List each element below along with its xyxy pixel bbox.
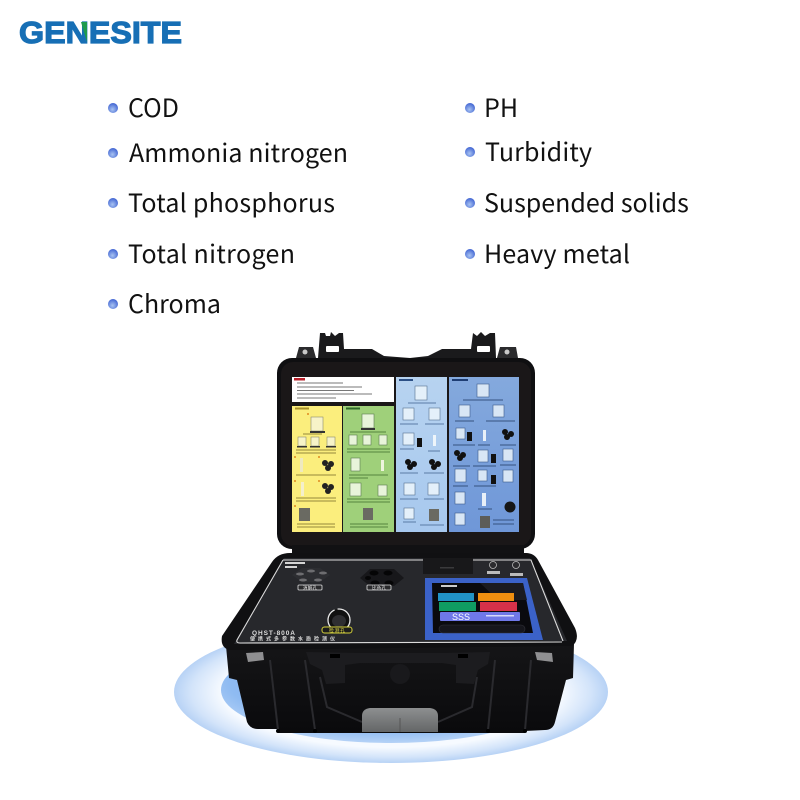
parameter list: left column: [108, 89, 348, 321]
handle: [362, 708, 438, 732]
bullet item: Ammonia nitrogen: Ammonia nitrogen: [129, 134, 348, 170]
bullet item: PH: PH: [484, 89, 518, 125]
instruction panel: light blue: [396, 377, 447, 532]
base rim: [222, 553, 577, 650]
case base: [222, 545, 577, 733]
model label: QHST-800A: [252, 630, 295, 637]
bullet item: Total phosphorus: Total phosphorus: [128, 184, 335, 220]
port cluster right: [360, 569, 404, 591]
bullet item: Turbidity: Turbidity: [485, 133, 592, 169]
model label: [250, 630, 335, 642]
printer slot: [423, 558, 473, 574]
instruction panel: blue: [449, 377, 519, 532]
label: colorimetric hole: 比色孔: [372, 584, 386, 591]
bullet item: Total nitrogen: Total nitrogen: [128, 235, 295, 271]
bullet item: Heavy metal: Heavy metal: [484, 235, 630, 271]
front clasps: [270, 660, 531, 730]
logo: GENESITE: GENESITE: [19, 16, 182, 50]
bullet item: PH: [465, 89, 518, 125]
lid shell: [277, 358, 535, 549]
instruction panel: yellow: [292, 406, 342, 532]
case lid: [277, 332, 535, 549]
corner hinges: [246, 652, 264, 662]
model label: 便携式多参数水质检测仪: [250, 636, 335, 642]
screen nav bar: [439, 625, 525, 633]
port cluster left: [292, 568, 330, 591]
brand label: [285, 562, 305, 568]
control panel face: [234, 558, 567, 644]
bullet item: Chroma: Chroma: [128, 285, 221, 321]
screen tile: teal: [438, 593, 474, 601]
parameter list: right column: [465, 89, 689, 271]
instruction panel: notes: [292, 377, 394, 402]
label: digestion hole: 消解孔: [303, 584, 318, 591]
touchscreen: SSS: [452, 612, 470, 622]
detection hole: 检测孔: [329, 627, 345, 634]
speaker grille: [390, 664, 410, 684]
bullet item: Suspended solids: Suspended solids: [484, 184, 689, 220]
bullet item: COD: COD: [128, 89, 179, 125]
lid hinges and latches: [318, 332, 496, 358]
screen tile: red: [480, 602, 517, 611]
control buttons: [487, 562, 523, 576]
screen tile: green: [439, 602, 476, 611]
detection hole: [322, 609, 352, 634]
screen tile: orange: [478, 593, 514, 601]
touchscreen: [425, 578, 543, 640]
instruction panel: green: [343, 406, 394, 532]
base front body: [226, 644, 574, 733]
screen tile: purple: [440, 612, 520, 621]
platform ellipse: [174, 621, 608, 763]
panel frame line: [237, 560, 563, 643]
